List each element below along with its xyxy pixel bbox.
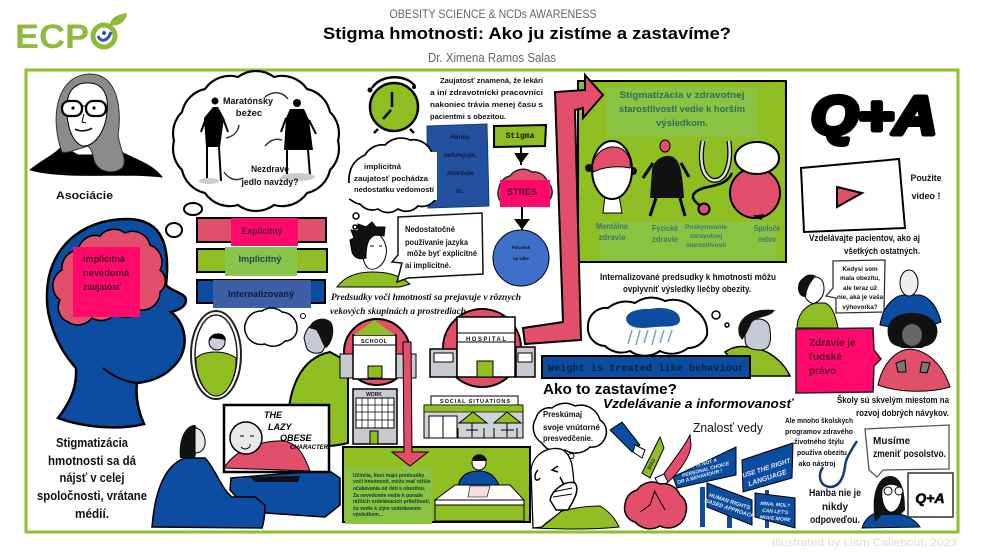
thought cloud: stereotypes: bežec — [236, 108, 262, 119]
note: shame: to. — [456, 188, 464, 195]
panel: TV scene with viewer — [152, 405, 340, 528]
text: bias meaning: a iní zdravotnícki pracovníci — [430, 88, 543, 97]
text: use video: video ! — [912, 191, 940, 202]
text: shame not answer: nikdy — [822, 502, 848, 513]
text: school programmes — [785, 416, 854, 468]
icon: video player — [801, 159, 905, 232]
icon: blue head with brain — [47, 219, 186, 427]
banner: weight treated like behaviour — [542, 356, 750, 378]
flow: stigma to stress: na váhe — [513, 256, 529, 261]
flow: stigma to stress — [493, 125, 552, 286]
heading: education: Vzdelávanie a informovanosť — [603, 397, 794, 411]
thought bubble: examine beliefs: svoje vnútorné — [543, 423, 601, 432]
box: small Q+A: Q+A — [915, 490, 945, 506]
thought cloud: stereotypes: Nezdravé — [251, 164, 289, 175]
icon: social situations: SOCIAL SITUATIONS — [440, 399, 510, 405]
icon: student at desk — [435, 454, 524, 521]
panel: green classroom: nižších vzdelávacích príležitostí, — [353, 499, 431, 505]
person: boy with speech bubble — [337, 213, 410, 287]
panel: TV scene with viewer: THE — [264, 410, 283, 420]
icon: mirror with reflection — [191, 311, 241, 399]
callout: health is a human right: Zdravie je — [809, 338, 856, 349]
icon: head with brain — [585, 141, 637, 213]
text: stigma in society: Stigmatizácia — [56, 435, 129, 450]
thought bubble: examine beliefs: Preskúmaj — [543, 410, 582, 419]
box: small Q+A — [908, 473, 953, 517]
text: stigma in society: médií. — [75, 506, 109, 521]
speech bubble: language: používanie jazyka — [405, 238, 469, 247]
panel: green classroom: Za nevedomie vedie k porade — [353, 493, 423, 499]
bar: Implicitny — [197, 247, 327, 276]
bar: Internalizovany — [197, 280, 325, 308]
panel: green classroom: Učitelia, ktorí majú predsudky — [353, 473, 424, 479]
icon: blue head with brain: zaujatosť — [83, 282, 122, 292]
text: Predsudky: Predsudky voči hmotnosti sa prejavuje v rôznych — [331, 293, 521, 303]
icon: hook — [820, 441, 857, 487]
flow: stigma to stress: Prirastok — [512, 245, 531, 250]
speech bubble: change the message — [865, 425, 949, 477]
person: man with green shirt — [725, 310, 790, 376]
panel: green classroom: očakávania od detí s obezitou. — [353, 486, 426, 492]
signs: protest placards: CAN LET'S — [762, 508, 789, 516]
note: shame — [427, 124, 489, 208]
speech bubble: change the message: Musíme — [873, 436, 911, 447]
panel: green classroom: čo vedie k zlým vzdelávaním — [353, 506, 421, 512]
icon: school: SCHOOL — [361, 339, 388, 345]
text: use video — [910, 173, 942, 202]
callout: health is a human right: právo — [809, 366, 836, 377]
green panel: health outcomes: zdravie — [652, 234, 678, 244]
bar: Implicitny: Implicitný — [238, 254, 282, 265]
text: school programmes: životného štýlu — [794, 437, 844, 446]
note: shame: Hanba — [450, 134, 470, 141]
signs: protest placards: IT IS NOT A — [690, 458, 718, 470]
signs: protest placards: MINA, MOL? — [760, 501, 790, 509]
text: educate patients — [809, 233, 920, 257]
icon: hands removing bias from brain — [610, 422, 691, 529]
panel: portrait of speaker — [30, 74, 162, 177]
signs: protest placards: LANGUAGE — [747, 469, 788, 488]
icon: work building: WORK — [366, 392, 382, 398]
icon: larger person — [199, 99, 316, 184]
bar: Explicitny: Explicitný — [242, 226, 283, 237]
author: Dr. Ximena Ramos Salas — [428, 51, 556, 65]
person: woman with curly hair — [878, 313, 950, 391]
bar: Internalizovany: Internalizovaný — [228, 289, 295, 300]
icon: alarm clock — [368, 77, 418, 133]
credit: Illustrated by Liam Callebout, 2023 — [772, 537, 957, 549]
green panel: health outcomes: Fyzické — [652, 223, 678, 233]
text: Predsudky: vekových skupinách a prostrediach — [330, 307, 466, 317]
text: school programmes: používa obezitu — [797, 448, 847, 457]
icon: hospital: HOSPITAL — [466, 337, 506, 343]
text: bias meaning: pacientmi s obezitou. — [430, 112, 506, 121]
thought cloud: implicit bias: implicitná — [364, 162, 402, 171]
icon: speech bubbles — [730, 142, 780, 219]
thought cloud: implicit bias: nedostatku vedomostí — [354, 185, 435, 194]
green panel: health outcomes: starostlivosti — [686, 242, 726, 249]
speech bubble: language: Nedostatočné — [405, 225, 456, 234]
green panel: health outcomes — [578, 81, 786, 262]
thought cloud: implicit bias — [349, 138, 437, 213]
text: stigma in society: nájsť v celej — [60, 470, 124, 485]
logo: ECPO — [15, 13, 127, 56]
icon: blue head with brain: implicitná — [83, 254, 126, 264]
person: man in blue — [880, 270, 941, 328]
green panel: health outcomes: nstvo — [758, 234, 776, 244]
green panel: health outcomes: Stigmatizácia v zdravotnej — [620, 90, 744, 101]
signs: protest placards: OR A BEHAVIOUR ! — [677, 468, 723, 486]
Q+A large title: Q+A — [811, 86, 937, 146]
bar: Explicitny — [197, 218, 326, 246]
green panel: health outcomes: zdravotnej — [690, 233, 722, 240]
signs: protest placards: HUMAN RIGHTS — [708, 493, 751, 512]
title: Stigma hmotnosti: Ako ju zistíme a zastavíme? — [323, 25, 731, 43]
person: man in green shirt looking at mirror — [288, 319, 348, 446]
text: shame not answer: Hanba nie je — [809, 488, 861, 499]
thought bubble: examine beliefs: presvedčenie. — [543, 434, 593, 443]
speech bubble: change the message: zmeniť posolstvo. — [873, 449, 946, 460]
text: educate patients: všetkých ostatných. — [844, 246, 920, 257]
text: school programmes: programov zdravého — [785, 427, 854, 436]
label: knowledge of science: Znalosť vedy — [693, 421, 764, 435]
callout: health is a human right — [796, 328, 881, 393]
logo: ECPO: ECP — [15, 18, 89, 56]
icon: social situations — [424, 396, 523, 438]
signs: protest placards: BASED APPROACH — [704, 498, 756, 520]
icon: thin runner — [201, 98, 228, 181]
green panel: health outcomes: Poskytovanie — [685, 224, 727, 231]
text: educate patients: Vzdelávajte pacientov, ako aj — [809, 233, 920, 244]
banner: weight treated like behaviour: Weight is treated like behaviour — [548, 363, 744, 375]
panel: green classroom — [343, 342, 530, 524]
thought cloud: stereotypes — [166, 71, 339, 237]
person: woman with speech bubble: mala obezitu, — [840, 275, 880, 282]
flow: stigma to stress: STRES — [507, 187, 537, 197]
speech bubble: language — [392, 213, 483, 282]
text: school programmes: ako nástroj — [798, 459, 836, 468]
green panel: health outcomes: starostlivosti vedie k horším — [619, 104, 745, 115]
thought cloud: self stigma — [245, 308, 306, 346]
panel: green classroom: voči hmotnosti, môžu mať nižšie — [353, 479, 431, 485]
header: series title: OBESITY SCIENCE & NCDs AWARENESS — [390, 7, 596, 21]
text: Predsudky — [330, 293, 521, 317]
panel: TV scene with viewer: CHARACTER — [290, 445, 329, 451]
signs: protest placards — [673, 443, 795, 528]
person: woman with speech bubble: Kedysi som — [842, 266, 878, 273]
text: stigma in society: hmotnosti sa dá — [48, 453, 137, 468]
icon: body figure — [643, 140, 689, 216]
text: schools: rozvoj dobrých návykov. — [856, 408, 949, 419]
flow: stigma to stress: Stigma — [506, 132, 535, 141]
text: bias meaning — [430, 76, 543, 121]
panel: TV scene with viewer: OBESE — [280, 433, 313, 443]
callout: health is a human right: ľudské — [809, 352, 842, 363]
label: Asociacie: Asociácie — [56, 190, 113, 202]
person: woman with speech bubble: nie, aká je vaša — [837, 294, 883, 301]
text: internalised bias: ovplyvniť výsledky liečby obezity. — [623, 284, 751, 295]
text: stigma in society — [37, 435, 147, 521]
panel: green classroom: výsledkom... — [353, 512, 384, 518]
green panel: health outcomes: výsledkom. — [656, 118, 708, 129]
heading: how to stop: Ako to zastavíme? — [543, 382, 677, 398]
text: bias meaning: Zaujatosť znamená, že lekári — [440, 76, 543, 85]
text: internalised bias: Internalizované predsudky k hmotnosti môžu — [600, 272, 776, 283]
person: thinking man — [531, 448, 619, 529]
thought cloud: rain — [588, 298, 729, 356]
text: use video: Použite — [910, 173, 942, 184]
text: schools — [837, 394, 950, 419]
icon: blue head with brain: nevedomá — [83, 268, 130, 278]
text: shame not answer: odpoveďou. — [810, 515, 860, 526]
arrow: pink to green panel — [523, 75, 603, 344]
thought cloud: implicit bias: zaujatosť pochádza — [354, 174, 429, 183]
green panel: health outcomes: zdravie — [598, 232, 626, 242]
note: shame: zhoršuje — [446, 170, 474, 177]
panel: TV scene with viewer: LAZY — [268, 422, 292, 432]
signs: protest placards: USE THE RIGHT — [742, 457, 792, 480]
icon: work building — [353, 389, 397, 444]
thought cloud: stereotypes: jedlo navždy? — [241, 177, 299, 188]
main frame — [26, 70, 958, 532]
text: school programmes: Ale mnoho školských — [785, 416, 853, 425]
person: presenter woman — [862, 476, 920, 528]
speech bubble: language: ai implicitné. — [405, 261, 451, 270]
green panel: health outcomes: Spoloče — [754, 223, 780, 233]
text: schools: Školy sú skvelým miestom na — [837, 394, 950, 406]
text: stigma in society: spoločnosti, vrátane — [37, 488, 147, 503]
thought cloud: stereotypes: Maratónsky — [223, 96, 274, 107]
icon: hospital — [430, 309, 535, 387]
icon: stethoscope — [693, 141, 732, 214]
speech bubble: language: môže byť explicitné — [407, 249, 478, 258]
signs: protest placards: PERSONAL CHOICE — [682, 461, 731, 479]
note: shame: nefunguje, — [444, 152, 477, 159]
text: internalised bias — [600, 272, 776, 295]
person: woman with speech bubble: výhovorka? — [842, 304, 878, 311]
person: woman with speech bubble — [797, 260, 885, 328]
green panel: health outcomes: Mentálne — [596, 221, 628, 231]
text: shame not answer — [809, 488, 861, 526]
person: woman with speech bubble: ale teraz už — [843, 285, 877, 292]
thought bubble: examine beliefs — [533, 403, 606, 458]
icon: school — [340, 319, 416, 385]
signs: protest placards: MOVE MORE — [759, 515, 792, 523]
text: bias meaning: nakoniec trávia menej času s — [430, 100, 543, 109]
icon: hands removing bias from brain: BIAS — [646, 457, 658, 471]
